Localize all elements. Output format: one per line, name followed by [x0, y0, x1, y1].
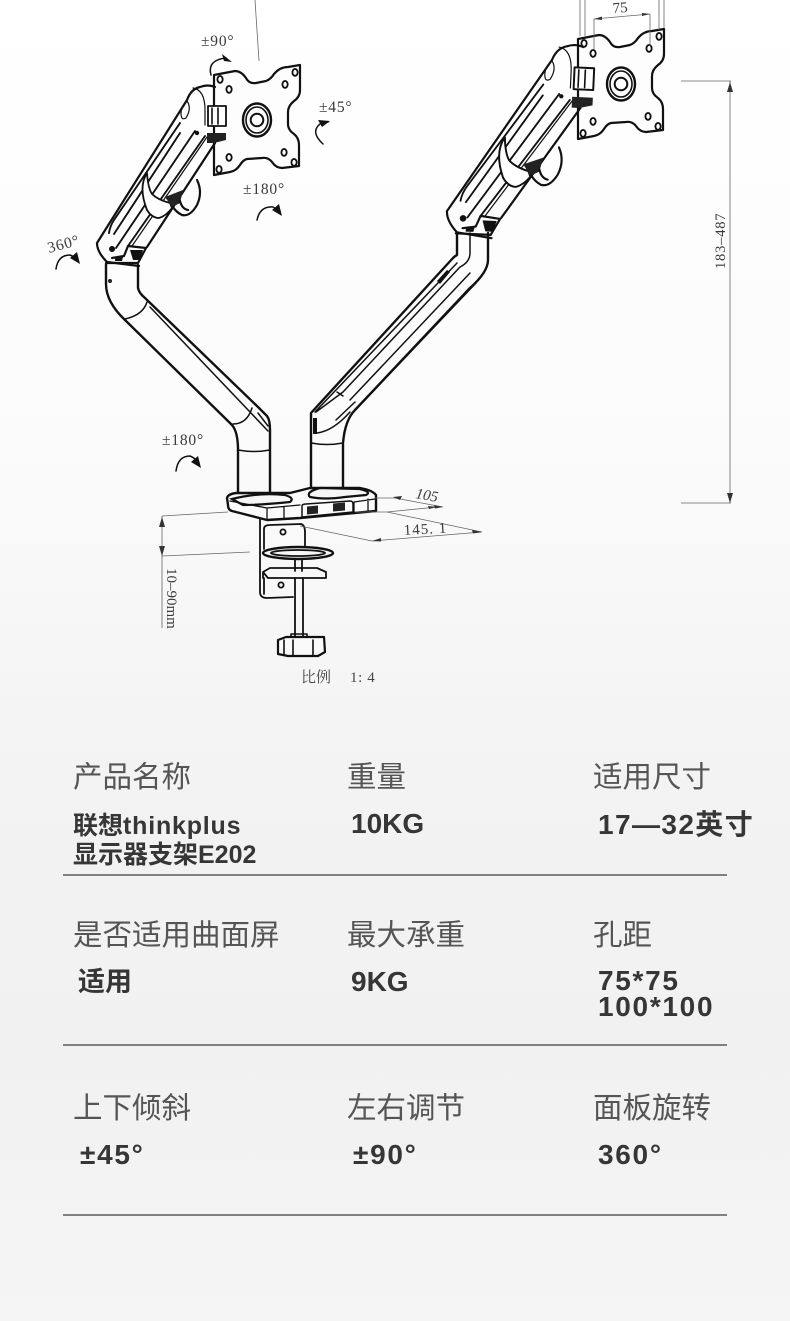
dimension 105: 105	[414, 486, 440, 506]
value: product name	[73, 812, 256, 869]
divider	[63, 1214, 727, 1216]
value: left-right adjust: ±90°	[353, 1139, 418, 1170]
label: hole spacing: 孔距	[593, 919, 652, 952]
value: product name: 联想thinkplus	[73, 812, 241, 840]
label: size: 适用尺寸	[593, 761, 711, 794]
dimension 145.1: 145. 1	[403, 521, 448, 539]
dimension 183-487: 183–487	[713, 213, 729, 269]
value: hole spacing	[598, 965, 714, 1022]
angle label ±45°: ±45°	[319, 99, 352, 116]
divider	[63, 1044, 727, 1046]
rotation arrows	[56, 54, 330, 471]
angle label base ±180°: ±180°	[162, 432, 204, 449]
label: max load: 最大承重	[347, 919, 465, 952]
right VESA plate	[578, 29, 664, 139]
spec row 3	[63, 1092, 727, 1216]
angle label ±90°: ±90°	[201, 33, 234, 50]
value: size: 17—32英寸	[598, 809, 754, 840]
label: panel rotation: 面板旋转	[593, 1092, 711, 1125]
angle label 360°: 360°	[46, 232, 82, 257]
scale note: 1: 4	[350, 670, 375, 686]
value: weight: 10KG	[351, 808, 424, 839]
label: weight: 重量	[347, 761, 406, 794]
technical drawing: dual monitor arm	[46, 0, 733, 686]
value: panel rotation: 360°	[598, 1139, 663, 1170]
value: tilt: ±45°	[80, 1139, 145, 1170]
value: curved screen: 适用	[78, 967, 132, 997]
dimension 75: 75	[612, 0, 628, 17]
label: left-right adjust: 左右调节	[347, 1092, 465, 1125]
left upper arm	[97, 86, 226, 266]
desk clamp	[260, 519, 333, 656]
left lower arm	[106, 264, 270, 496]
dimension lines	[159, 0, 733, 628]
spec row 2	[63, 919, 727, 1046]
right upper arm	[446, 40, 595, 243]
value: product name: 显示器支架E202	[73, 841, 256, 869]
spec row 1	[63, 761, 754, 876]
dimension 10-90mm: 10–90mm	[163, 568, 179, 629]
desk base with USB ports	[227, 488, 376, 520]
label: product name: 产品名称	[73, 761, 191, 794]
value: max load: 9KG	[351, 966, 409, 997]
label: curved screen: 是否适用曲面屏	[73, 919, 280, 952]
angle label ±180°: ±180°	[243, 181, 285, 198]
scale note: 比例	[301, 670, 331, 686]
value: hole spacing: 75*75	[598, 965, 680, 996]
left VESA plate	[214, 65, 300, 175]
right lower arm	[311, 233, 488, 490]
value: hole spacing: 100*100	[598, 991, 714, 1022]
divider	[63, 874, 727, 876]
label: tilt: 上下倾斜	[73, 1092, 191, 1125]
